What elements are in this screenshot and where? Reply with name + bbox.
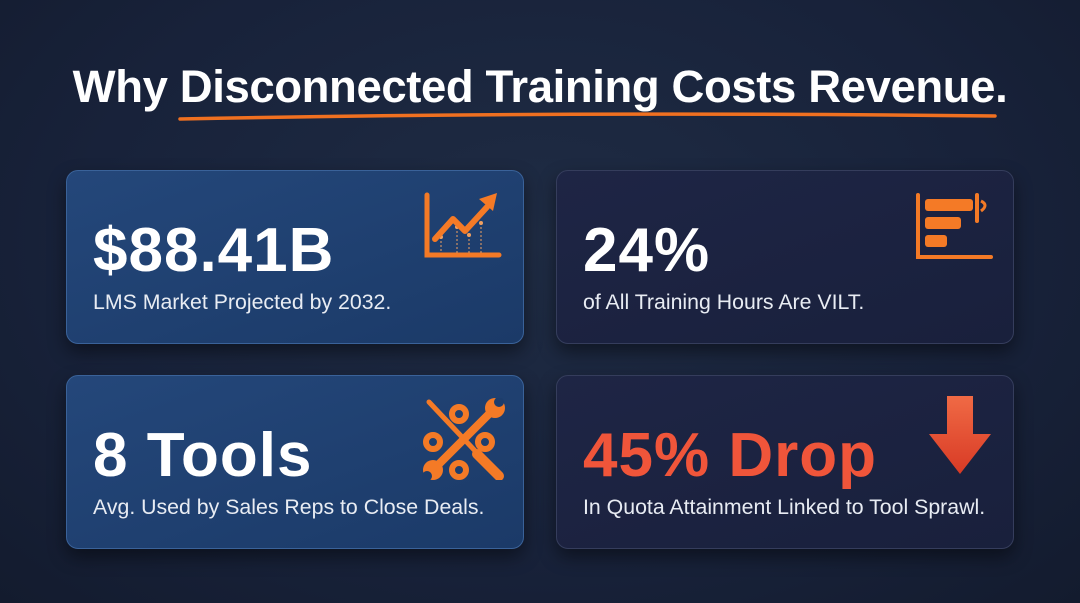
title: Why Disconnected Training Costs Revenue. — [73, 61, 1007, 112]
stat: 8 Tools: 8 Tools — [93, 421, 312, 490]
icon: wrench and screwdriver with gears — [423, 398, 505, 480]
text: quota attainment: In Quota Attainment Linked to Tool Sprawl. — [583, 495, 985, 519]
icon: down arrow — [929, 396, 991, 474]
panel: VILT — [556, 170, 1014, 344]
text: LMS Market: LMS Market Projected by 2032. — [93, 290, 391, 314]
panel: 45% drop — [556, 375, 1014, 549]
stat: 45% Drop: 45% Drop — [583, 421, 877, 490]
icon: rising chart — [424, 192, 502, 258]
icon: bar chart — [916, 193, 993, 259]
stat: $88.41B: $88.41B — [93, 216, 334, 285]
stat: 24%: 24% — [583, 216, 710, 285]
text: VILT: of All Training Hours Are VILT. — [583, 290, 864, 314]
panel: LMS market — [66, 170, 524, 344]
title underline — [178, 112, 997, 121]
text: sales reps tools: Avg. Used by Sales Reps to Close Deals. — [93, 495, 484, 519]
panel: 8 tools — [66, 375, 524, 549]
